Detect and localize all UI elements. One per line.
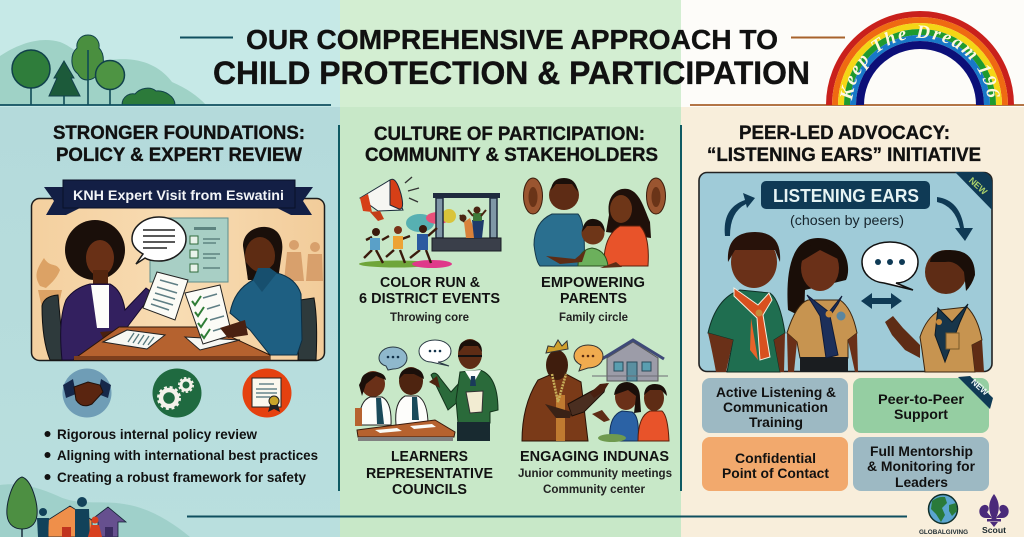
label: color run and 6 district events <box>359 275 500 324</box>
bullet list: Rigorous internal policy review <box>57 426 257 442</box>
label: learners representative councils: COUNCILS <box>392 482 467 498</box>
scout girl <box>787 238 858 372</box>
badge: listening ears title: LISTENING EARS <box>773 186 919 206</box>
badge: listening ears title <box>761 181 930 228</box>
heading: peer-led advocacy: PEER-LED ADVOCACY: <box>739 123 950 144</box>
heading: peer-led advocacy <box>707 123 981 166</box>
label: empowering parents: PARENTS <box>560 291 627 307</box>
scout boy left <box>708 232 785 372</box>
heading: stronger foundations <box>53 123 305 166</box>
illustration: color run and stage <box>359 177 501 268</box>
logo: Keep The Dream 196 rainbow: Keep The Dream 196 <box>840 25 1000 101</box>
banner: KNH Expert Visit from Eswatini: KNH Expert Visit from Eswatini <box>73 187 284 203</box>
box: active listening: Active Listening & <box>716 385 836 400</box>
label: empowering parents: EMPOWERING <box>541 275 645 291</box>
box: confidential point of contact: Point of Contact <box>722 466 830 481</box>
bottom rule <box>187 516 907 518</box>
box: active listening: Training <box>749 415 803 430</box>
label: color run and 6 district events: Throwing core <box>390 310 469 324</box>
column divider right <box>680 125 682 491</box>
illustration: empowering parents family <box>524 178 666 268</box>
header rules <box>0 104 1024 106</box>
box: active listening <box>702 378 848 433</box>
scout boy right <box>885 250 984 372</box>
label: color run and 6 district events: 6 DISTRICT EVENTS <box>359 291 500 307</box>
title lines <box>180 36 845 38</box>
heading: culture of participation: COMMUNITY & STAKEHOLDERS <box>365 145 658 166</box>
box: full mentorship <box>853 437 989 491</box>
box: peer-to-peer support: Peer-to-Peer <box>878 392 965 407</box>
arrow: circular left <box>725 193 755 236</box>
panel: peer-led advocacy <box>699 123 993 491</box>
column divider left <box>338 125 340 491</box>
heading: stronger foundations: POLICY & EXPERT REVIEW <box>56 145 302 166</box>
label: learners representative councils <box>366 449 493 498</box>
illustration: expert review meeting <box>32 198 324 360</box>
bullet list <box>44 426 318 485</box>
bullet list: Aligning with international best practices <box>57 447 318 463</box>
label: empowering parents: Family circle <box>559 310 628 324</box>
panel: culture of participation <box>355 124 672 498</box>
box: full mentorship: Full Mentorship <box>870 444 973 459</box>
illustration: bottom-left village <box>0 477 190 537</box>
logo: GlobalGiving: GLOBALGIVING <box>919 529 968 536</box>
box: confidential point of contact <box>702 437 848 491</box>
label: engaging indunas: ENGAGING INDUNAS <box>520 449 669 465</box>
box: active listening: Communication <box>723 400 828 415</box>
icon: handshake <box>62 368 112 418</box>
box: full mentorship: Leaders <box>895 475 948 490</box>
label: engaging indunas: Community center <box>543 482 645 496</box>
label: learners representative councils: REPRESENTATIVE <box>366 466 493 482</box>
title <box>213 24 810 91</box>
heading: culture of participation: CULTURE OF PARTICIPATION: <box>374 124 645 145</box>
heading: stronger foundations: STRONGER FOUNDATIONS: <box>53 123 305 144</box>
logo: Scout fleur-de-lis <box>979 494 1009 535</box>
label: empowering parents <box>541 275 645 324</box>
illustration: listening ears scouts <box>699 172 992 372</box>
label: engaging indunas <box>518 449 672 496</box>
illustration: engaging indunas <box>522 340 669 442</box>
speech bubble <box>862 242 918 290</box>
badge: listening ears title: (chosen by peers) <box>790 213 904 228</box>
box: confidential point of contact: Confidential <box>735 451 816 466</box>
illustration: learners representative council <box>355 339 498 441</box>
bullet list: Creating a robust framework for safety <box>57 469 306 485</box>
title: CHILD PROTECTION & PARTICIPATION <box>213 55 810 91</box>
label: learners representative councils: LEARNERS <box>391 449 468 465</box>
ribbon: new badge <box>955 172 992 210</box>
illustration: top-left landscape with trees <box>0 35 206 105</box>
banner: KNH Expert Visit from Eswatini <box>44 180 313 215</box>
box: peer-to-peer support <box>853 376 993 433</box>
logo: GlobalGiving <box>919 494 968 536</box>
logo: Scout fleur-de-lis: Scout <box>982 525 1006 535</box>
box: peer-to-peer support: Support <box>894 407 949 422</box>
icon: gears <box>152 368 202 418</box>
label: color run and 6 district events: COLOR RUN & <box>380 275 481 291</box>
title: OUR COMPREHENSIVE APPROACH TO <box>246 24 778 55</box>
icon: certificate <box>242 368 292 418</box>
ribbon: new badge: NEW <box>969 377 991 398</box>
heading: peer-led advocacy: “LISTENING EARS” INITIATIVE <box>707 145 981 166</box>
ribbon: new badge: NEW <box>967 175 990 197</box>
arrow: circular right <box>937 197 973 241</box>
heading: culture of participation <box>365 124 658 166</box>
panel: stronger foundations <box>0 123 324 537</box>
box: full mentorship: & Monitoring for <box>867 459 976 474</box>
arrow: double headed <box>861 293 902 309</box>
label: engaging indunas: Junior community meetings <box>518 466 672 480</box>
